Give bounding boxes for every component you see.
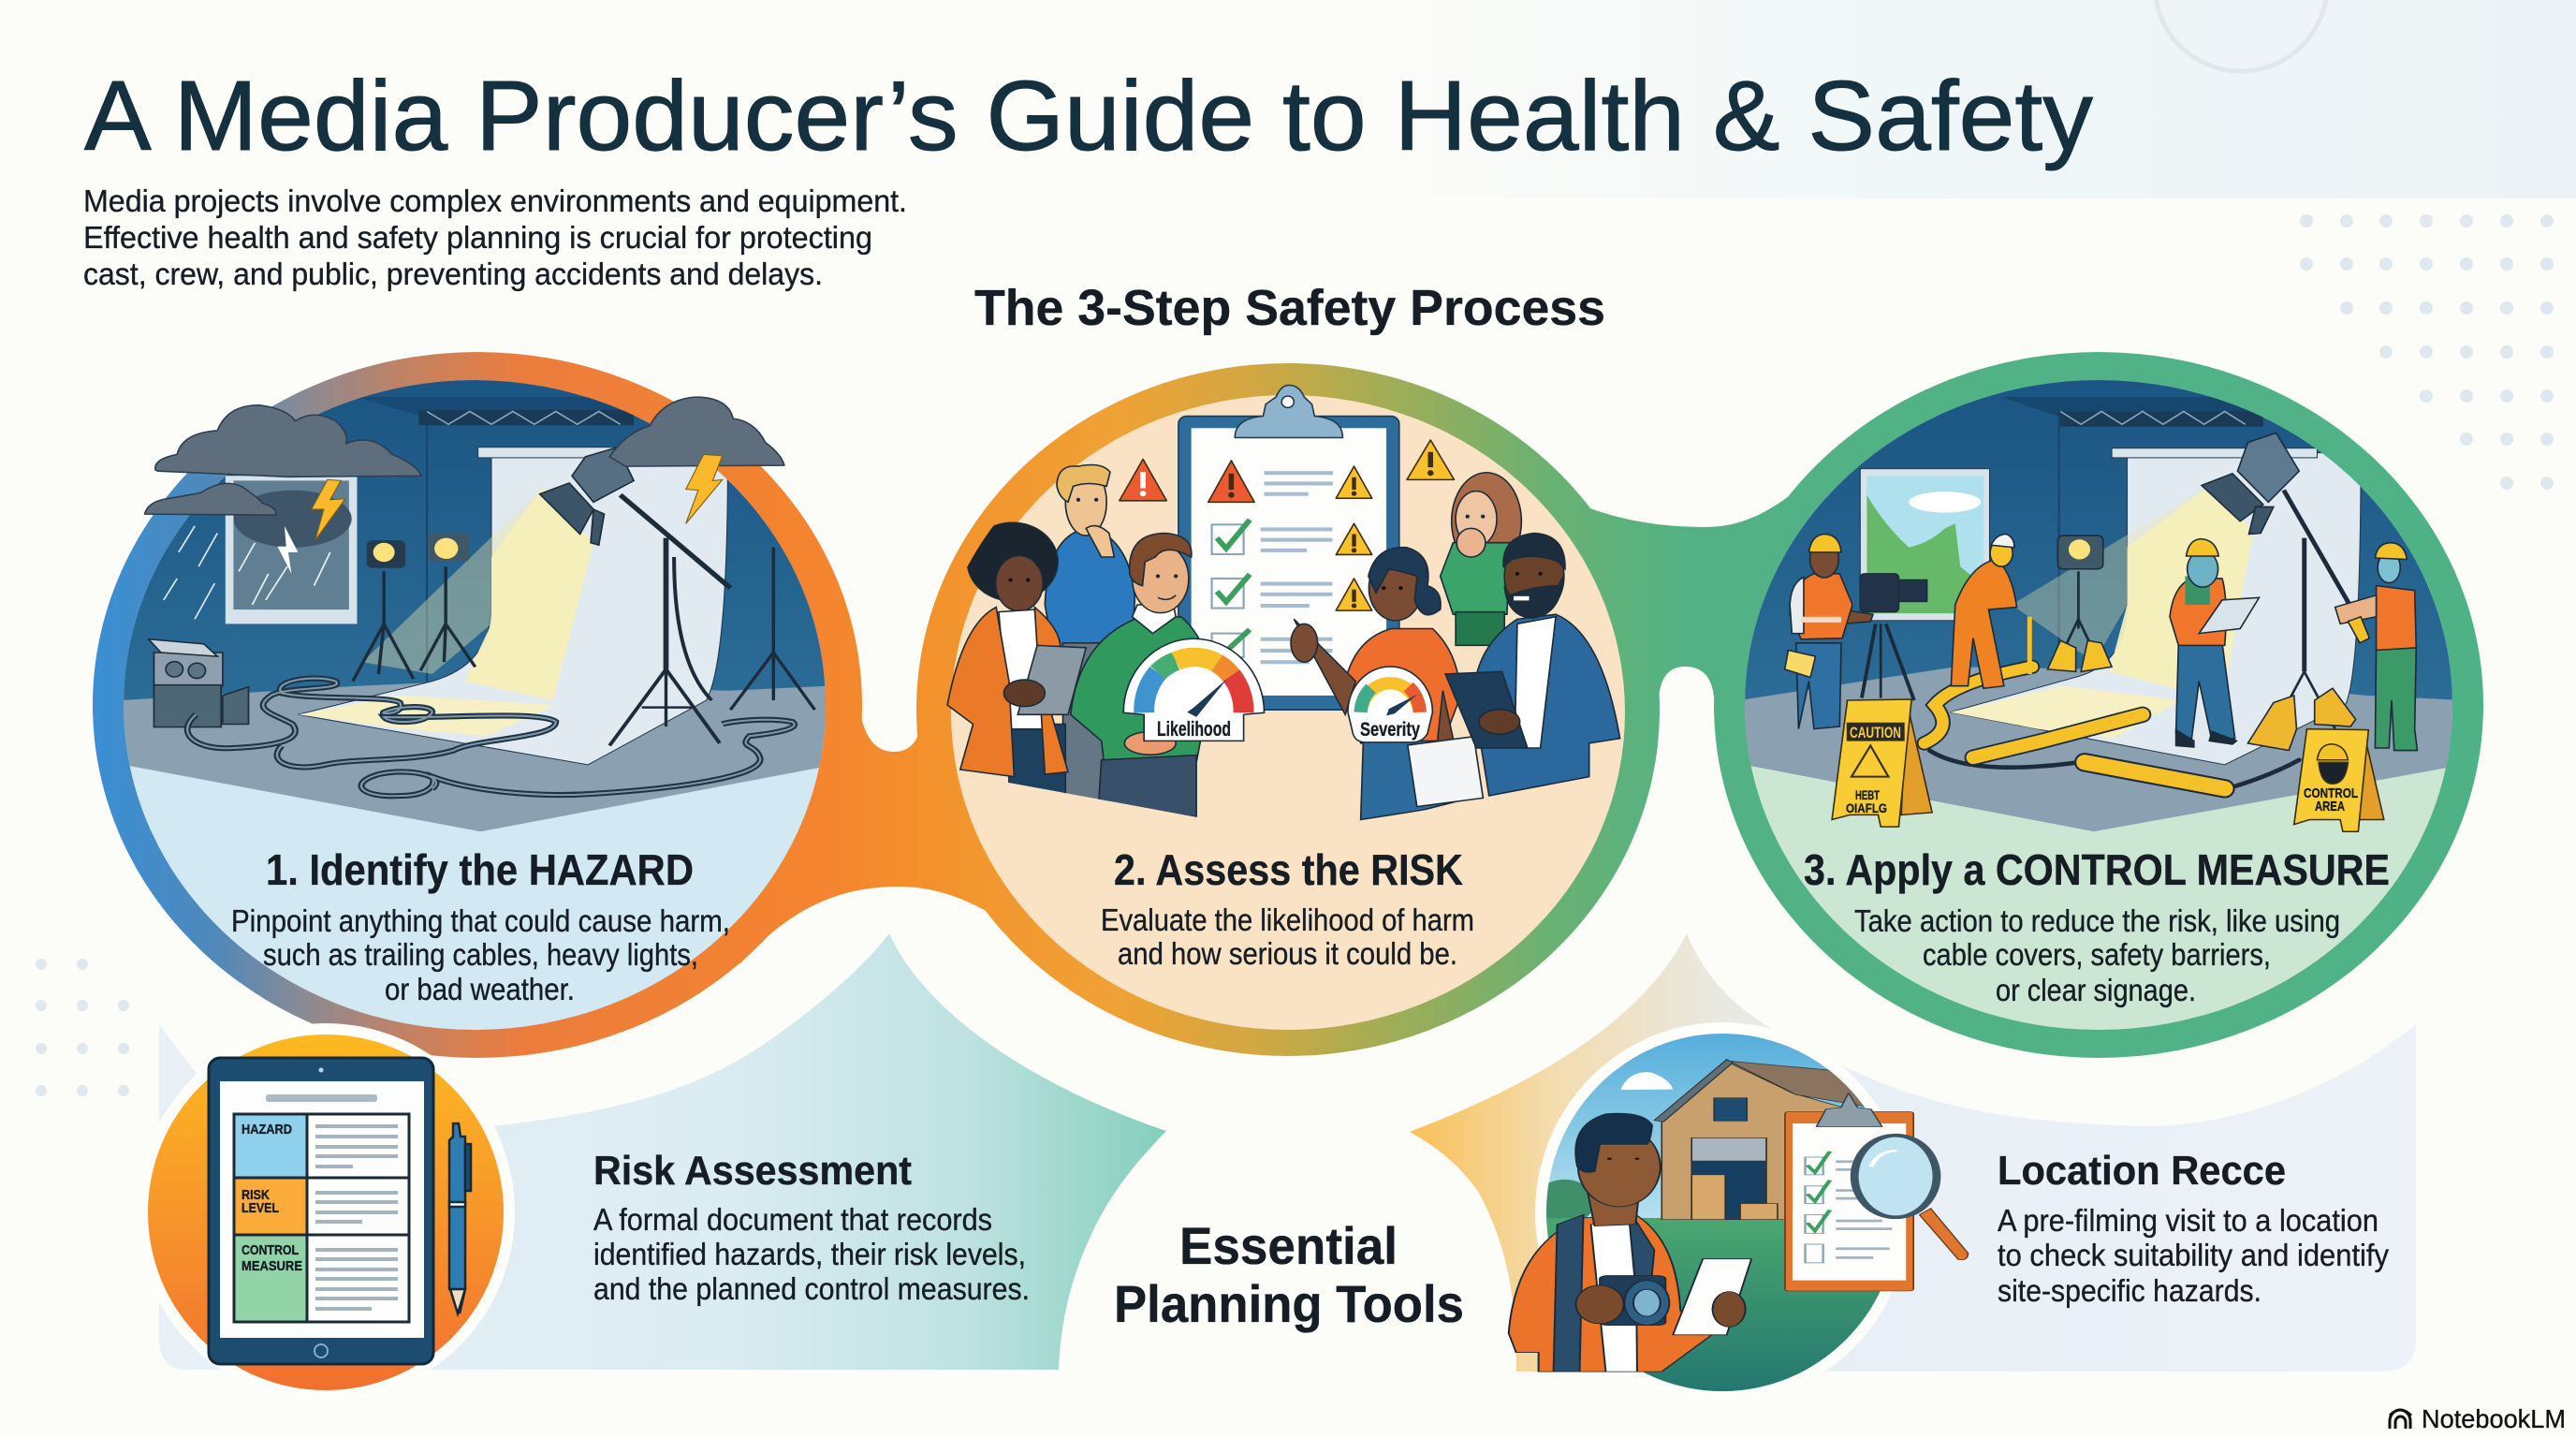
icon: tablet with risk assessment table: CONTROL (242, 1242, 299, 1258)
barn (1654, 1060, 1882, 1220)
location recce description (1998, 1203, 2389, 1308)
person: left woman in orange blazer (947, 522, 1086, 796)
step 3 description (1854, 903, 2340, 1007)
worker: cable crew in orange (1951, 535, 2029, 688)
panel: step 2 assess the risk (947, 385, 1625, 1030)
icon: location recce illustration (1509, 1022, 1968, 1402)
dot pattern: lower left (36, 959, 129, 1096)
panel: step 1 identify the hazard (110, 366, 835, 1030)
step 3 heading: 3. Apply a CONTROL MEASURE (1804, 845, 2390, 894)
section heading: essential planning tools: Essential (1179, 1216, 1398, 1275)
header gradient band (1357, 0, 2576, 198)
illustration: team assessing risk (947, 385, 1620, 820)
icon: tablet with risk assessment table: RISK (242, 1187, 270, 1203)
person: back left man in blue (1045, 465, 1134, 800)
notebooklm logo mark and name: NotebookLM (2422, 1404, 2566, 1433)
icon: tablet with risk assessment table: HAZARD (242, 1122, 292, 1137)
sign: caution (1832, 699, 1932, 827)
section heading: essential planning tools (1114, 1216, 1464, 1333)
sign lettering (1846, 724, 2358, 815)
step 1 description: Pinpoint anything that could cause harm, (231, 903, 730, 938)
worker: rigger at right (2335, 543, 2417, 751)
icon: pen (449, 1123, 471, 1313)
section heading: essential planning tools: Planning Tools (1114, 1274, 1464, 1333)
intro text: Effective health and safety planning is crucial for protecting (83, 220, 872, 255)
person: man holding likelihood gauge (1071, 534, 1212, 817)
icon: tablet with risk assessment table: MEASURE (242, 1258, 302, 1274)
clipboard checklist (1178, 385, 1399, 710)
worker: supervisor with clipboard (2170, 539, 2259, 747)
floor lights (353, 548, 814, 710)
person: back right woman (1441, 473, 1521, 645)
gauge labels: Severity (1360, 719, 1420, 741)
step 1 description: or bad weather. (385, 972, 575, 1006)
backdrop (298, 457, 728, 765)
location recce description: to check suitability and identify (1998, 1238, 2389, 1272)
warning triangles (1120, 440, 1454, 610)
sign lettering: AREA (2315, 799, 2345, 814)
panel: risk assessment background (159, 933, 1166, 1370)
process ribbon rings (93, 352, 2483, 1058)
sign lettering: CAUTION (1850, 724, 1901, 741)
gauge: severity (1348, 667, 1432, 742)
step 1 heading: 1. Identify the HAZARD (266, 845, 694, 894)
intro text: cast, crew, and public, preventing accidents and delays. (83, 257, 823, 291)
risk assessment description: A formal document that records (593, 1202, 992, 1237)
location recce heading: Location Recce (1998, 1148, 2286, 1194)
illustration: controlled studio (1734, 366, 2474, 831)
sign lettering: CONTROL (2304, 785, 2358, 801)
panel: location recce background (1410, 933, 2416, 1372)
panel: step 3 apply a control measure (1734, 366, 2474, 1030)
person: man in blue suit (1445, 534, 1620, 796)
backdrop (1950, 452, 2361, 765)
illustration: hazardous studio (110, 366, 835, 833)
dot pattern: upper right (2300, 214, 2554, 490)
floor light and sandbags (2047, 536, 2112, 671)
step 3 description: cable covers, safety barriers, (1923, 937, 2271, 972)
generator box (149, 639, 248, 727)
risk assessment heading: Risk Assessment (593, 1148, 912, 1194)
sign lettering: HEBT (1855, 787, 1880, 802)
location recce description: site-specific hazards. (1998, 1273, 2261, 1308)
step 2 description: Evaluate the likelihood of harm (1101, 902, 1474, 937)
step 3 description: Take action to reduce the risk, like using (1854, 903, 2340, 938)
step 2 description: and how serious it could be. (1118, 936, 1457, 971)
risk assessment description (593, 1202, 1030, 1306)
location recce description: A pre-filming visit to a location (1998, 1203, 2378, 1238)
step 1 description: such as trailing cables, heavy lights, (263, 937, 698, 972)
yellow cable covers (1925, 667, 2299, 788)
intro text: Media projects involve complex environments and equipment. (83, 183, 907, 218)
gauge labels (1157, 717, 1420, 741)
person with camera and notepad (1509, 1113, 1751, 1372)
worker: camera operator (1785, 535, 1927, 729)
icon: tablet with risk assessment table (137, 1023, 515, 1401)
step 1 description (231, 903, 730, 1006)
sign lettering: OIAFLG (1846, 800, 1887, 815)
step 3 description: or clear signage. (1996, 973, 2196, 1007)
title: A Media Producer’s Guide to Health & Safety (84, 61, 2093, 171)
window with storm (226, 476, 357, 624)
step 2 heading: 2. Assess the RISK (1114, 845, 1463, 894)
icon: tablet with risk assessment table: LEVEL (242, 1200, 279, 1216)
window with clear sky (1860, 469, 1990, 621)
magnifying glass (1854, 1136, 1968, 1260)
sandbags (2247, 688, 2356, 751)
clipboard with checklist (1785, 1093, 1913, 1291)
person: woman in orange tee (1291, 548, 1483, 820)
trailing cables (187, 679, 795, 796)
section heading: process: The 3-Step Safety Process (974, 280, 1605, 336)
icon: storm clouds and lightning (145, 397, 784, 540)
step 2 description (1101, 902, 1474, 971)
intro text (83, 183, 907, 291)
risk assessment description: and the planned control measures. (593, 1271, 1030, 1306)
main light on boom (2202, 433, 2364, 729)
gauge: likelihood (1123, 638, 1265, 741)
main light on boom (540, 448, 730, 745)
sign: control area (2294, 729, 2384, 831)
gauge labels: Likelihood (1157, 717, 1231, 741)
risk assessment description: identified hazards, their risk levels, (593, 1237, 1026, 1271)
